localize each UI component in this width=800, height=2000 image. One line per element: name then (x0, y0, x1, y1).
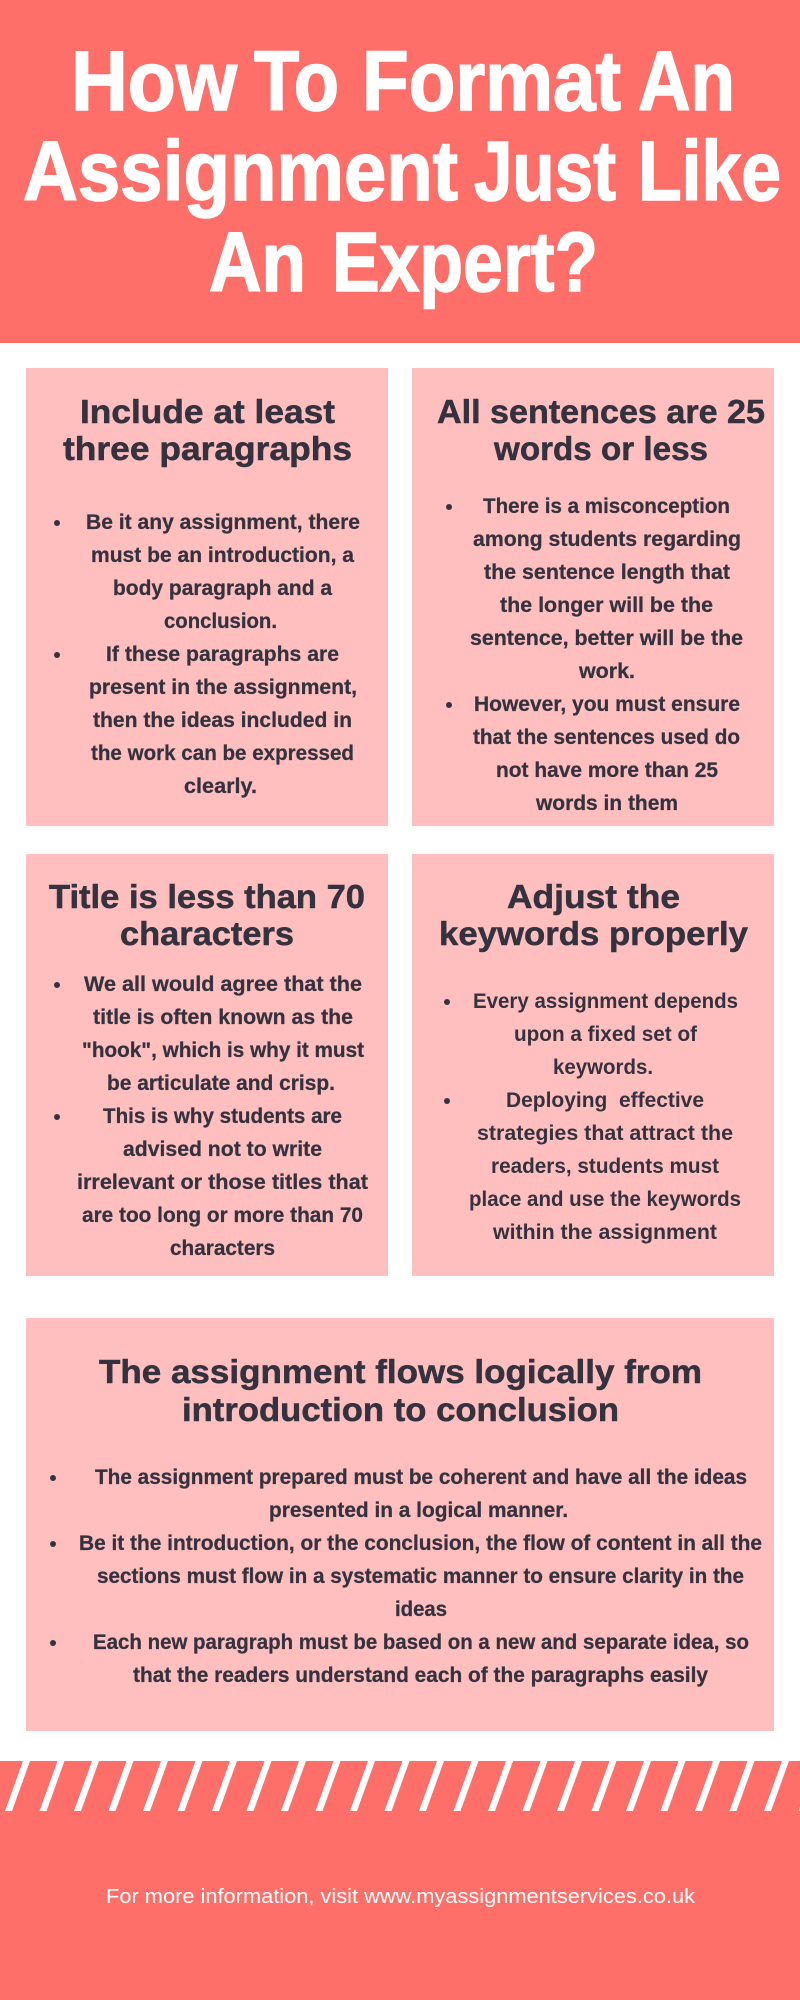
bullet list: the work can be expressed (91, 742, 354, 765)
title: Format (362, 34, 621, 128)
bullet list: the sentence length that (484, 561, 730, 584)
bullet list: are too long or more than 70 (82, 1204, 363, 1227)
bullet list: Each new paragraph must be based on a new and separate idea, so (93, 1631, 749, 1654)
heading: adjust the keywords properly: Adjust the (507, 878, 680, 915)
bullet list: sentence, better will be the (470, 627, 743, 650)
heading: adjust the keywords properly: keywords properly (439, 915, 749, 952)
bullet list: the longer will be the (500, 594, 713, 617)
bullet list: present in the assignment, (89, 676, 357, 699)
bullet list: keywords. (553, 1056, 653, 1079)
bullet list: However, you must ensure (474, 693, 740, 716)
bullet list (54, 973, 368, 1260)
bullet list: Deploying effective (506, 1089, 704, 1112)
bullet list: If these paragraphs are (106, 643, 339, 666)
bullet list: Every assignment depends (473, 990, 738, 1013)
bullet list: place and use the keywords (469, 1188, 741, 1211)
bullet list: We all would agree that the (84, 973, 362, 996)
title: An (209, 215, 306, 309)
bullet list: title is often known as the (93, 1006, 353, 1029)
bullet list: irrelevant or those titles that (77, 1171, 368, 1194)
bullet list: characters (170, 1237, 275, 1260)
bullet list: words in them (535, 792, 678, 815)
heading: adjust the keywords properly (439, 878, 749, 952)
bullet list: advised not to write (123, 1138, 322, 1161)
heading: include at least three paragraphs: three paragraphs (63, 430, 352, 467)
heading: title is less than 70 characters: Title is less than 70 (49, 878, 365, 915)
bullet list: body paragraph and a (113, 577, 332, 600)
footer banner (0, 1761, 800, 2000)
bullet list: This is why students are (103, 1105, 342, 1128)
bullet list: among students regarding (473, 528, 741, 551)
bullet list: that the readers understand each of the paragraphs easily (133, 1664, 708, 1687)
panel: the assignment flows logically (26, 1318, 774, 1731)
heading: all sentences are 25 words or less (437, 393, 765, 467)
bullet list: conclusion. (164, 610, 277, 633)
bullet list: Be it any assignment, there (86, 511, 360, 534)
title (23, 34, 781, 309)
header banner (0, 0, 800, 343)
bullet list: "hook", which is why it must (82, 1039, 364, 1062)
bullet list (444, 990, 741, 1244)
decorative slanted stripes (5, 1761, 800, 1811)
heading: the assignment flows logically: introduction to conclusion (182, 1391, 619, 1428)
bullet list (446, 495, 743, 815)
heading: include at least three paragraphs (63, 393, 352, 467)
panel: include at least three paragraphs (26, 368, 388, 826)
heading: title is less than 70 characters (49, 878, 365, 952)
bullet list: that the sentences used do (473, 726, 740, 749)
bullet list: not have more than 25 (496, 759, 718, 782)
heading: the assignment flows logically (99, 1353, 702, 1428)
panel: adjust the keywords properly (412, 854, 774, 1276)
title: To (254, 34, 339, 128)
bullet list: upon a fixed set of (514, 1023, 698, 1046)
bullet list: must be an introduction, a (91, 544, 354, 567)
heading: the assignment flows logically: The assignment flows logically from (99, 1353, 702, 1390)
title: Just (474, 124, 616, 218)
bullet list: ideas (395, 1598, 447, 1621)
heading: all sentences are 25 words or less: words or less (493, 430, 708, 467)
bullet list: be articulate and crisp. (107, 1072, 335, 1095)
bullet list: readers, students must (491, 1155, 719, 1178)
bullet list (54, 511, 360, 798)
heading: title is less than 70 characters: characters (120, 915, 294, 952)
title: An (638, 34, 735, 128)
footer text: For more information, visit www.myassignmentservices.co.uk (106, 1886, 696, 1908)
bullet list: There is a misconception (483, 495, 730, 518)
bullet list: clearly. (184, 775, 257, 798)
heading: include at least three paragraphs: Include at least (80, 393, 335, 430)
title: Assignment (23, 124, 458, 218)
bullet list: The assignment prepared must be coherent and have all the ideas (95, 1466, 747, 1489)
heading: all sentences are 25 words or less: All sentences are 25 (437, 393, 765, 430)
bullet list: within the assignment (492, 1221, 717, 1244)
panel: all sentences are 25 words or less (412, 368, 774, 826)
title: Expert? (332, 215, 598, 309)
bullet list: sections must flow in a systematic manner to ensure clarity in the (97, 1565, 744, 1588)
bullet list: then the ideas included in (93, 709, 352, 732)
bullet list: presented in a logical manner. (269, 1499, 568, 1522)
bullet list: strategies that attract the (477, 1122, 733, 1145)
bullet list (50, 1466, 762, 1687)
bullet list: work. (578, 660, 635, 683)
panel: title is less than 70 characters (26, 854, 388, 1276)
title: How (71, 34, 238, 128)
bullet list: Be it the introduction, or the conclusion, the flow of content in all the (79, 1532, 762, 1555)
